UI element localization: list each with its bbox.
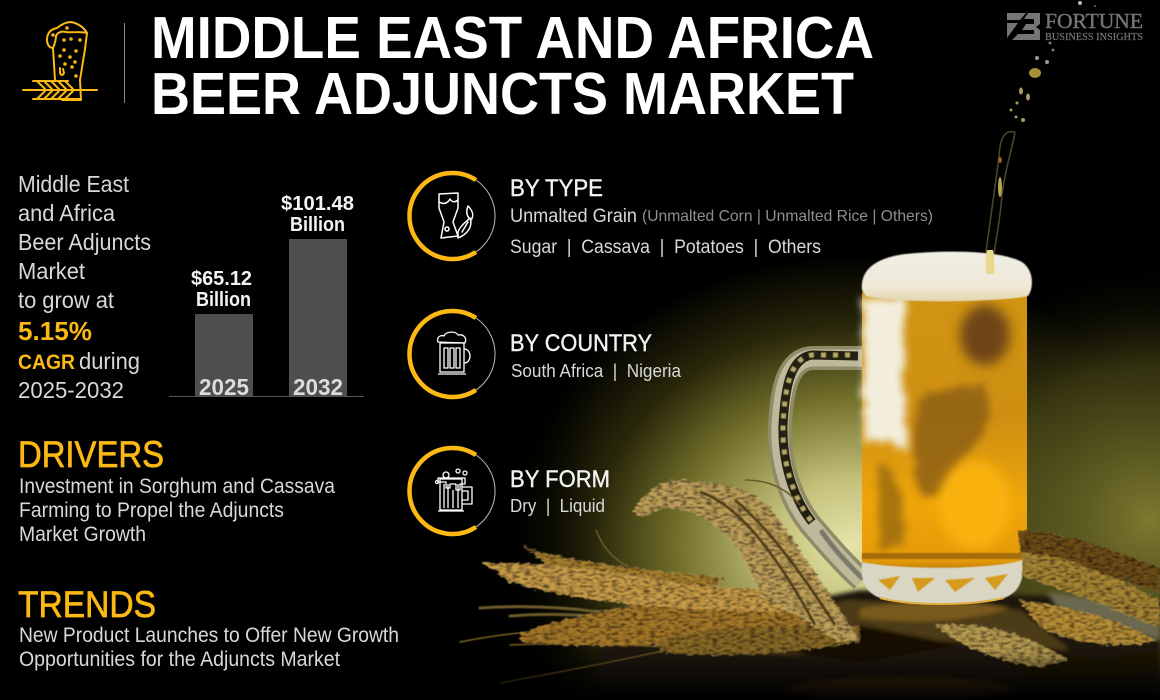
- logo: Fortune Business Insights: [1007, 9, 1143, 43]
- table surface: [600, 590, 1160, 700]
- segment: by form: Dry | Liquid: [510, 496, 605, 516]
- title: MIDDLE EAST AND AFRICA: [151, 5, 873, 71]
- logo: Fortune Business Insights: BUSINESS INSIGHTS: [1045, 32, 1143, 43]
- divider: [124, 23, 125, 103]
- segment: by form: BY FORM: [510, 466, 610, 493]
- bar chart: [169, 193, 364, 400]
- beer stream and droplets: [986, 1, 1096, 274]
- wheat: hanging ear: [633, 480, 860, 642]
- bar: 2032: 2032: [293, 374, 343, 400]
- trends: [18, 584, 399, 671]
- segment: by type: (Unmalted Corn | Unmalted Rice | Others): [642, 208, 933, 225]
- text: CAGR summary: Beer Adjuncts: [18, 229, 151, 255]
- drivers: Farming to Propel the Adjuncts: [19, 499, 284, 522]
- trends: New Product Launches to Offer New Growth: [19, 624, 399, 647]
- icon: beer glass and wheat logo: [23, 22, 97, 100]
- icon: beer glass with wheat in ring: [409, 173, 495, 259]
- mug foam: [862, 252, 1032, 301]
- segment: by type: BY TYPE: [510, 175, 603, 202]
- bar: 2032: [281, 193, 354, 400]
- icon: beer mug in ring: [409, 311, 495, 397]
- text: CAGR summary: 5.15%: [18, 316, 92, 346]
- drivers: [18, 434, 335, 546]
- mug handle: [780, 355, 862, 580]
- text: CAGR summary: 2025-2032: [18, 377, 124, 403]
- text: CAGR summary: to grow at: [18, 287, 115, 313]
- segment: by type: Sugar | Cassava | Potatoes | Others: [510, 237, 821, 258]
- text: CAGR summary: [18, 171, 151, 403]
- segment: by form: [409, 448, 610, 534]
- bar: 2032: Billion: [290, 214, 345, 236]
- drivers: Market Growth: [19, 523, 146, 546]
- segment: by type: [409, 173, 933, 259]
- bottom fade: [440, 650, 1160, 700]
- text: CAGR summary: Market: [18, 258, 86, 284]
- drivers: Investment in Sorghum and Cassava: [19, 475, 335, 498]
- bar: 2025: $65.12: [191, 268, 252, 290]
- text: CAGR summary: and Africa: [18, 200, 115, 226]
- segment: by country: BY COUNTRY: [510, 330, 652, 357]
- text: CAGR summary: CAGR: [18, 351, 75, 374]
- wheat: left ears: [460, 530, 860, 683]
- trends: Opportunities for the Adjuncts Market: [19, 648, 340, 671]
- bar: 2025: [191, 268, 253, 400]
- bar: 2025: Billion: [196, 289, 251, 311]
- segment: by country: South Africa | Nigeria: [511, 361, 682, 381]
- background glow: [480, 230, 1160, 700]
- text: CAGR summary: during: [79, 348, 140, 374]
- segment: by type: Unmalted Grain: [510, 206, 637, 227]
- trends: TRENDS: [18, 584, 156, 625]
- title: BEER ADJUNCTS MARKET: [151, 61, 854, 127]
- bar: 2032: $101.48: [281, 193, 354, 215]
- mug base: [862, 560, 1023, 604]
- segment: by country: [409, 311, 682, 397]
- text: CAGR summary: Middle East: [18, 171, 130, 197]
- bar: 2025: 2025: [199, 374, 249, 400]
- icon: frothy tankard in ring: [409, 448, 495, 534]
- wheat: right ears: [935, 530, 1160, 668]
- logo: Fortune Business Insights: FORTUNE: [1045, 9, 1143, 33]
- beer mug: [862, 252, 1032, 575]
- drivers: DRIVERS: [18, 434, 164, 475]
